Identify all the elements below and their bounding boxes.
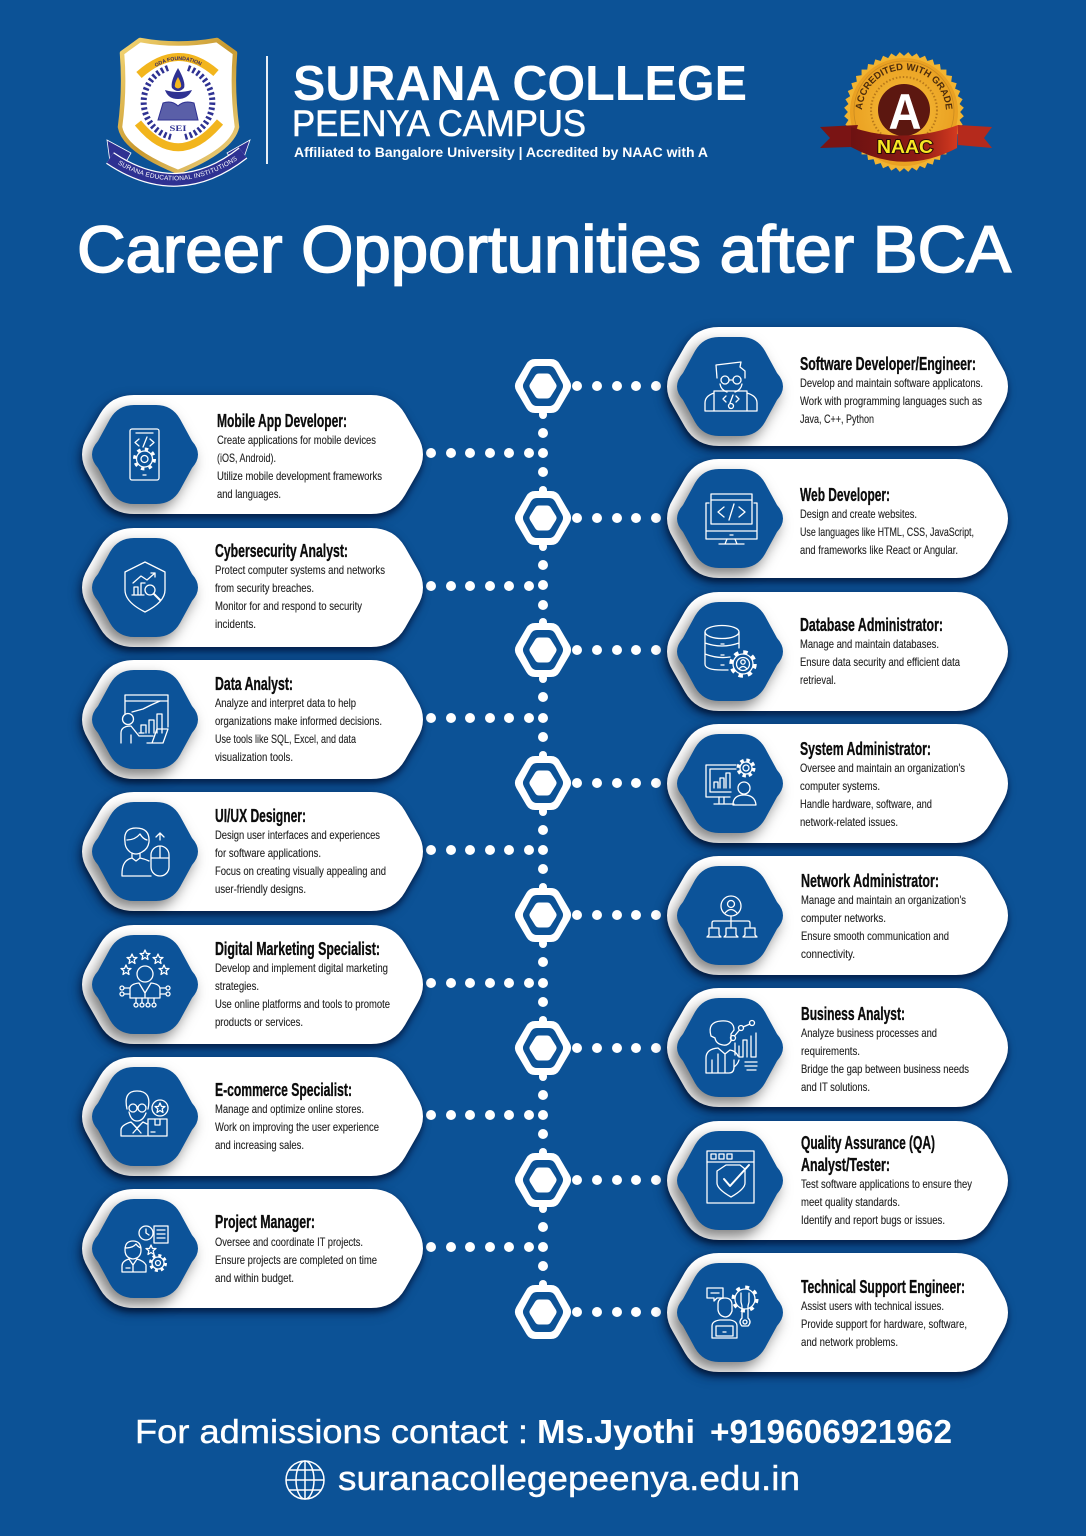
icon: manager with clock and gear [122,1226,168,1272]
SEI mark: SEI [170,123,187,133]
description: Identify and report bugs or issues. [801,1213,945,1227]
lamp flame [172,68,184,91]
description: for software applications. [215,846,321,860]
panel: Project Manager [82,1189,423,1308]
grade circle [878,84,930,136]
NAAC badge [820,52,992,172]
description: Develop and implement digital marketing [215,961,388,975]
college name: SURANA COLLEGE [293,57,747,111]
panel: Network Administrator [667,856,1008,975]
contact line: Ms.Jyothi [537,1413,695,1450]
icon: quality check window [707,1151,754,1203]
title: Cybersecurity Analyst: [215,540,348,561]
panel: Software Developer/Engineer [667,327,1008,446]
panel: Quality Assurance (QA) Analyst/Tester [667,1121,1008,1240]
description: network-related issues. [800,815,898,829]
description: products or services. [215,1015,303,1029]
title: Software Developer/Engineer: [800,353,976,374]
lamp bowl [165,90,192,99]
title: Digital Marketing Specialist: [215,938,380,959]
description: retrieval. [800,673,836,687]
title: Career Opportunities after BCA [77,212,1011,286]
panel: System Administrator [667,724,1008,843]
description: and increasing sales. [215,1138,304,1152]
campus name: PEENYA CAMPUS [292,103,586,144]
contact line: For admissions contact : [135,1413,528,1450]
description: Ensure projects are completed on time [215,1253,377,1267]
icon: globe [286,1461,324,1499]
contact line [135,1413,952,1450]
title: Network Administrator: [801,870,939,891]
laurel wreath [144,68,212,137]
description: Develop and maintain software applicatons. [800,376,983,390]
title [801,1132,935,1175]
description: strategies. [215,979,259,993]
description: Bridge the gap between business needs [801,1062,969,1076]
description: from security breaches. [215,581,314,595]
panel: Digital Marketing Specialist [82,925,423,1044]
icon: marketer with stars and nodes [120,950,170,1007]
description: computer networks. [801,911,886,925]
panel: Technical Support Engineer [667,1253,1008,1372]
description: Use online platforms and tools to promote [215,997,390,1011]
title: Quality Assurance (QA) [801,1132,935,1153]
description: Use tools like SQL, Excel, and data [215,732,356,746]
bottom banner text: SURANA EDUCATIONAL INSTITUTIONS [118,156,237,180]
description [215,961,390,1029]
description: organizations make informed decisions. [215,714,382,728]
description: meet quality standards. [801,1195,900,1209]
icon: support with wrench and gear [707,1287,757,1338]
description: visualization tools. [215,750,293,764]
description [215,696,382,764]
title: Technical Support Engineer: [801,1276,965,1297]
description: connectivity. [801,947,855,961]
icon: database with gear [705,626,755,676]
description: Design and create websites. [800,507,917,521]
icon: mobile with gear [130,429,159,480]
college logo: shield crest [106,38,251,187]
open book [158,102,198,120]
description: Ensure data security and efficient data [800,655,960,669]
title: Project Manager: [215,1211,315,1232]
description: Work with programming languages such as [800,394,982,408]
title: UI/UX Designer: [215,805,306,826]
description [215,828,386,896]
panel: E-commerce Specialist [82,1057,423,1176]
description: Test software applications to ensure they [801,1177,972,1191]
title: E-commerce Specialist: [215,1079,352,1100]
bottom banner [110,153,243,180]
description: and languages. [217,487,281,501]
contact line: +919606921962 [710,1413,952,1450]
top ribbon text: ODA FOUNDATION [154,56,202,66]
description: incidents. [215,617,256,631]
description [800,637,960,687]
description: Utilize mobile development frameworks [217,469,382,483]
description [801,1177,972,1227]
description: Manage and maintain databases. [800,637,939,651]
icon: analyst with chart board [121,695,168,743]
description: Oversee and coordinate IT projects. [215,1235,363,1249]
icon: developer at laptop [705,362,757,411]
description [800,507,974,557]
description: Ensure smooth communication and [801,929,949,943]
title: Mobile App Developer: [217,410,347,431]
description: Create applications for mobile devices [217,433,376,447]
description: Manage and maintain an organization's [801,893,966,907]
shield outline [120,40,237,172]
description: (iOS, Android). [217,451,276,465]
description: Design user interfaces and experiences [215,828,380,842]
ribbon tails [820,125,858,148]
panel: Data Analyst [82,660,423,779]
icon: network hierarchy [707,896,757,937]
description: and frameworks like React or Angular. [800,543,958,557]
banner tails [107,140,250,162]
description: requirements. [801,1044,860,1058]
description: Use languages like HTML, CSS, JavaScript, [800,525,974,539]
icon: analyst with chart [706,1020,757,1073]
description: Monitor for and respond to security [215,599,362,613]
panel: Mobile App Developer [82,395,423,514]
icon: web code monitor [706,494,757,544]
title: Web Developer: [800,484,890,505]
seal text: ACCREDITED WITH GRADE [856,63,952,110]
lower ribbon [138,122,220,147]
description [215,563,385,631]
header divider [266,56,268,164]
panel: Cybersecurity Analyst [82,528,423,647]
timeline hexagon nodes [525,369,561,1329]
description [800,376,983,426]
description: and within budget. [215,1271,294,1285]
description [801,893,966,961]
panel: Business Analyst [667,988,1008,1107]
icon: monitor with gear and admin [706,760,756,805]
title: Data Analyst: [215,673,293,694]
seal face [850,58,958,166]
description: Analyze business processes and [801,1026,937,1040]
description [215,1235,377,1285]
description: Analyze and interpret data to help [215,696,356,710]
description [801,1299,967,1349]
top ribbon [139,57,216,75]
title: Analyst/Tester: [801,1154,890,1175]
title: Business Analyst: [801,1003,905,1024]
seal teeth [844,52,964,172]
description: Assist users with technical issues. [801,1299,944,1313]
panel: UI/UX Designer [82,792,423,911]
title: System Administrator: [800,738,931,759]
description [215,1102,379,1152]
panel: Web Developer [667,459,1008,578]
connector dots [426,381,661,1317]
description: Handle hardware, software, and [800,797,932,811]
description: Java, C++, Python [800,412,874,426]
description: and IT solutions. [801,1080,870,1094]
description [800,761,965,829]
title: Database Administrator: [800,614,943,635]
description: Protect computer systems and networks [215,563,385,577]
description: Manage and optimize online stores. [215,1102,364,1116]
icon: shield with chart [125,562,165,612]
panel: Database Administrator [667,592,1008,711]
description: computer systems. [800,779,880,793]
description [801,1026,969,1094]
NAAC text: NAAC [877,137,933,157]
icon: person with mouse [122,828,169,876]
description: Oversee and maintain an organization's [800,761,965,775]
description: Focus on creating visually appealing and [215,864,386,878]
ribbon [851,125,958,162]
icon: e-commerce specialist with box [121,1091,168,1136]
website: suranacollegepeenya.edu.in [338,1460,800,1498]
description [217,433,382,501]
description: and network problems. [801,1335,898,1349]
description: user-friendly designs. [215,882,306,896]
grade letter: A [888,84,922,140]
description: Provide support for hardware, software, [801,1317,967,1331]
affiliation line: Affiliated to Bangalore University | Accredited by NAAC with A [294,144,708,160]
description: Work on improving the user experience [215,1120,379,1134]
